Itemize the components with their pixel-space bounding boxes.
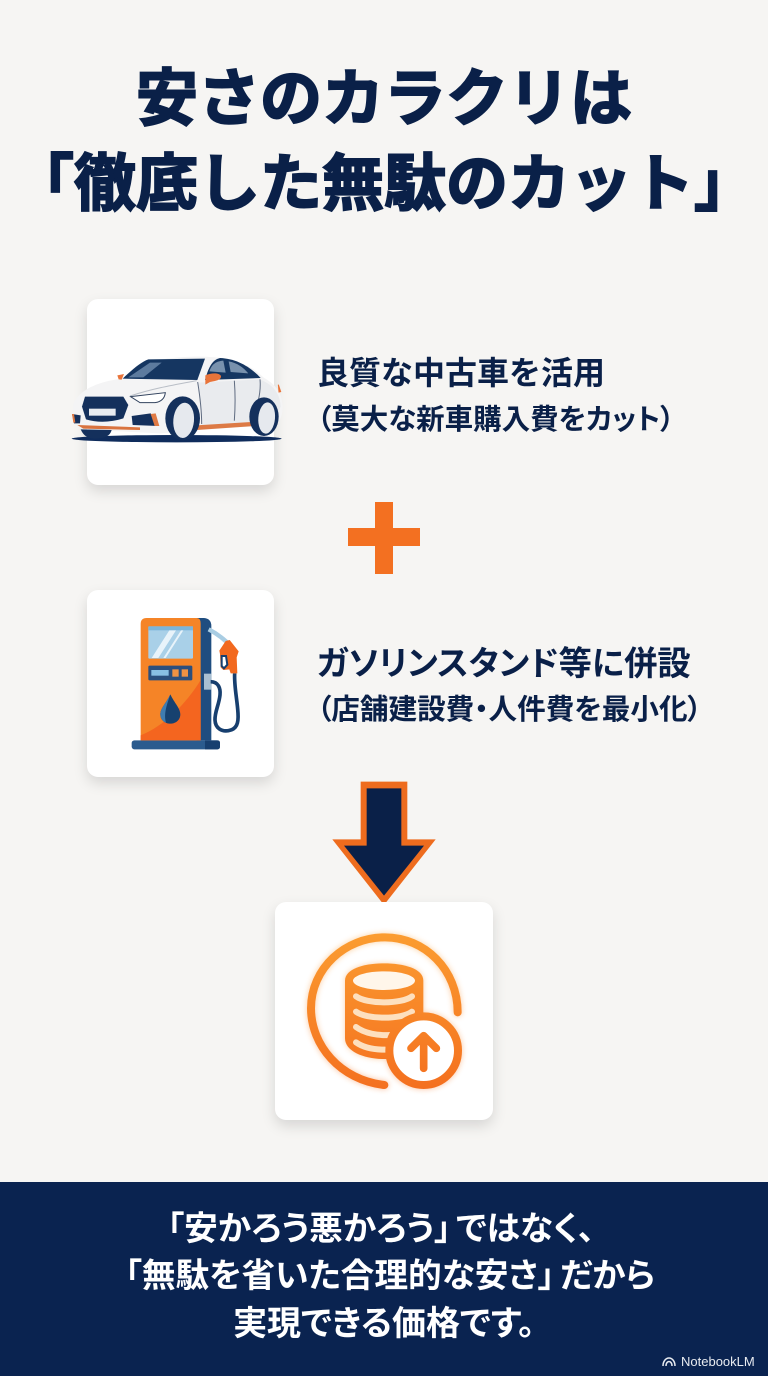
title line 1: 安さのカラクリは bbox=[136, 65, 632, 134]
text: gas station bbox=[317, 646, 702, 726]
watermark: NotebookLM: NotebookLM bbox=[681, 1354, 755, 1369]
note: used car: （莫大な新車購入費をカット） bbox=[317, 404, 675, 436]
panel: used car card bbox=[87, 299, 274, 485]
note: gas station: （店舗建設費・人件費を最小化） bbox=[317, 694, 702, 726]
icon: fuel pump bbox=[132, 618, 240, 750]
conclusion line 3: 実現できる価格です。 bbox=[233, 1305, 535, 1343]
panel: gas station card bbox=[87, 590, 274, 777]
icon: NotebookLM logo bbox=[662, 1357, 676, 1366]
title line 2: 「徹底した無駄のカット」 bbox=[12, 150, 756, 219]
heading: used car: 良質な中古車を活用 bbox=[317, 355, 605, 391]
text: used car bbox=[317, 355, 675, 436]
conclusion line 2: 「無駄を省いた合理的な安さ」だから bbox=[125, 1257, 655, 1295]
arrow: result bbox=[332, 782, 436, 902]
panel: savings card bbox=[275, 902, 493, 1120]
conclusion line 1: 「安かろう悪かろう」ではなく、 bbox=[167, 1210, 595, 1248]
icon: coins with up arrow bbox=[303, 930, 466, 1093]
panel: conclusion band bbox=[0, 1182, 768, 1376]
heading: gas station: ガソリンスタンド等に併設 bbox=[317, 646, 691, 683]
icon: plus bbox=[348, 502, 420, 574]
title bbox=[12, 65, 756, 219]
icon: car bbox=[72, 356, 282, 442]
